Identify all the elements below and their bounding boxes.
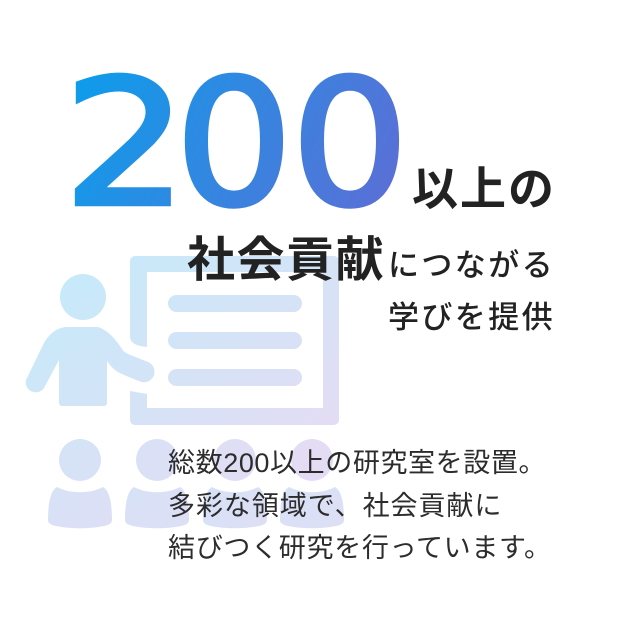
body text [168, 448, 552, 563]
heading: につながる: につながる [388, 248, 555, 283]
big number 200: 2 [63, 43, 188, 246]
body text: 総数200以上の研究室を設置。 [168, 448, 546, 478]
heading: 社会貢献: 社会貢献 [187, 234, 385, 287]
big number 200: 0 [175, 43, 293, 246]
body text: 結びつく研究を行っています。 [168, 533, 552, 563]
heading: 学びを提供: 学びを提供 [388, 300, 555, 335]
heading: 以上の: 以上の [412, 163, 556, 215]
big number 200: 0 [291, 43, 409, 246]
body text: 多彩な領域で、社会貢献に [168, 491, 502, 521]
